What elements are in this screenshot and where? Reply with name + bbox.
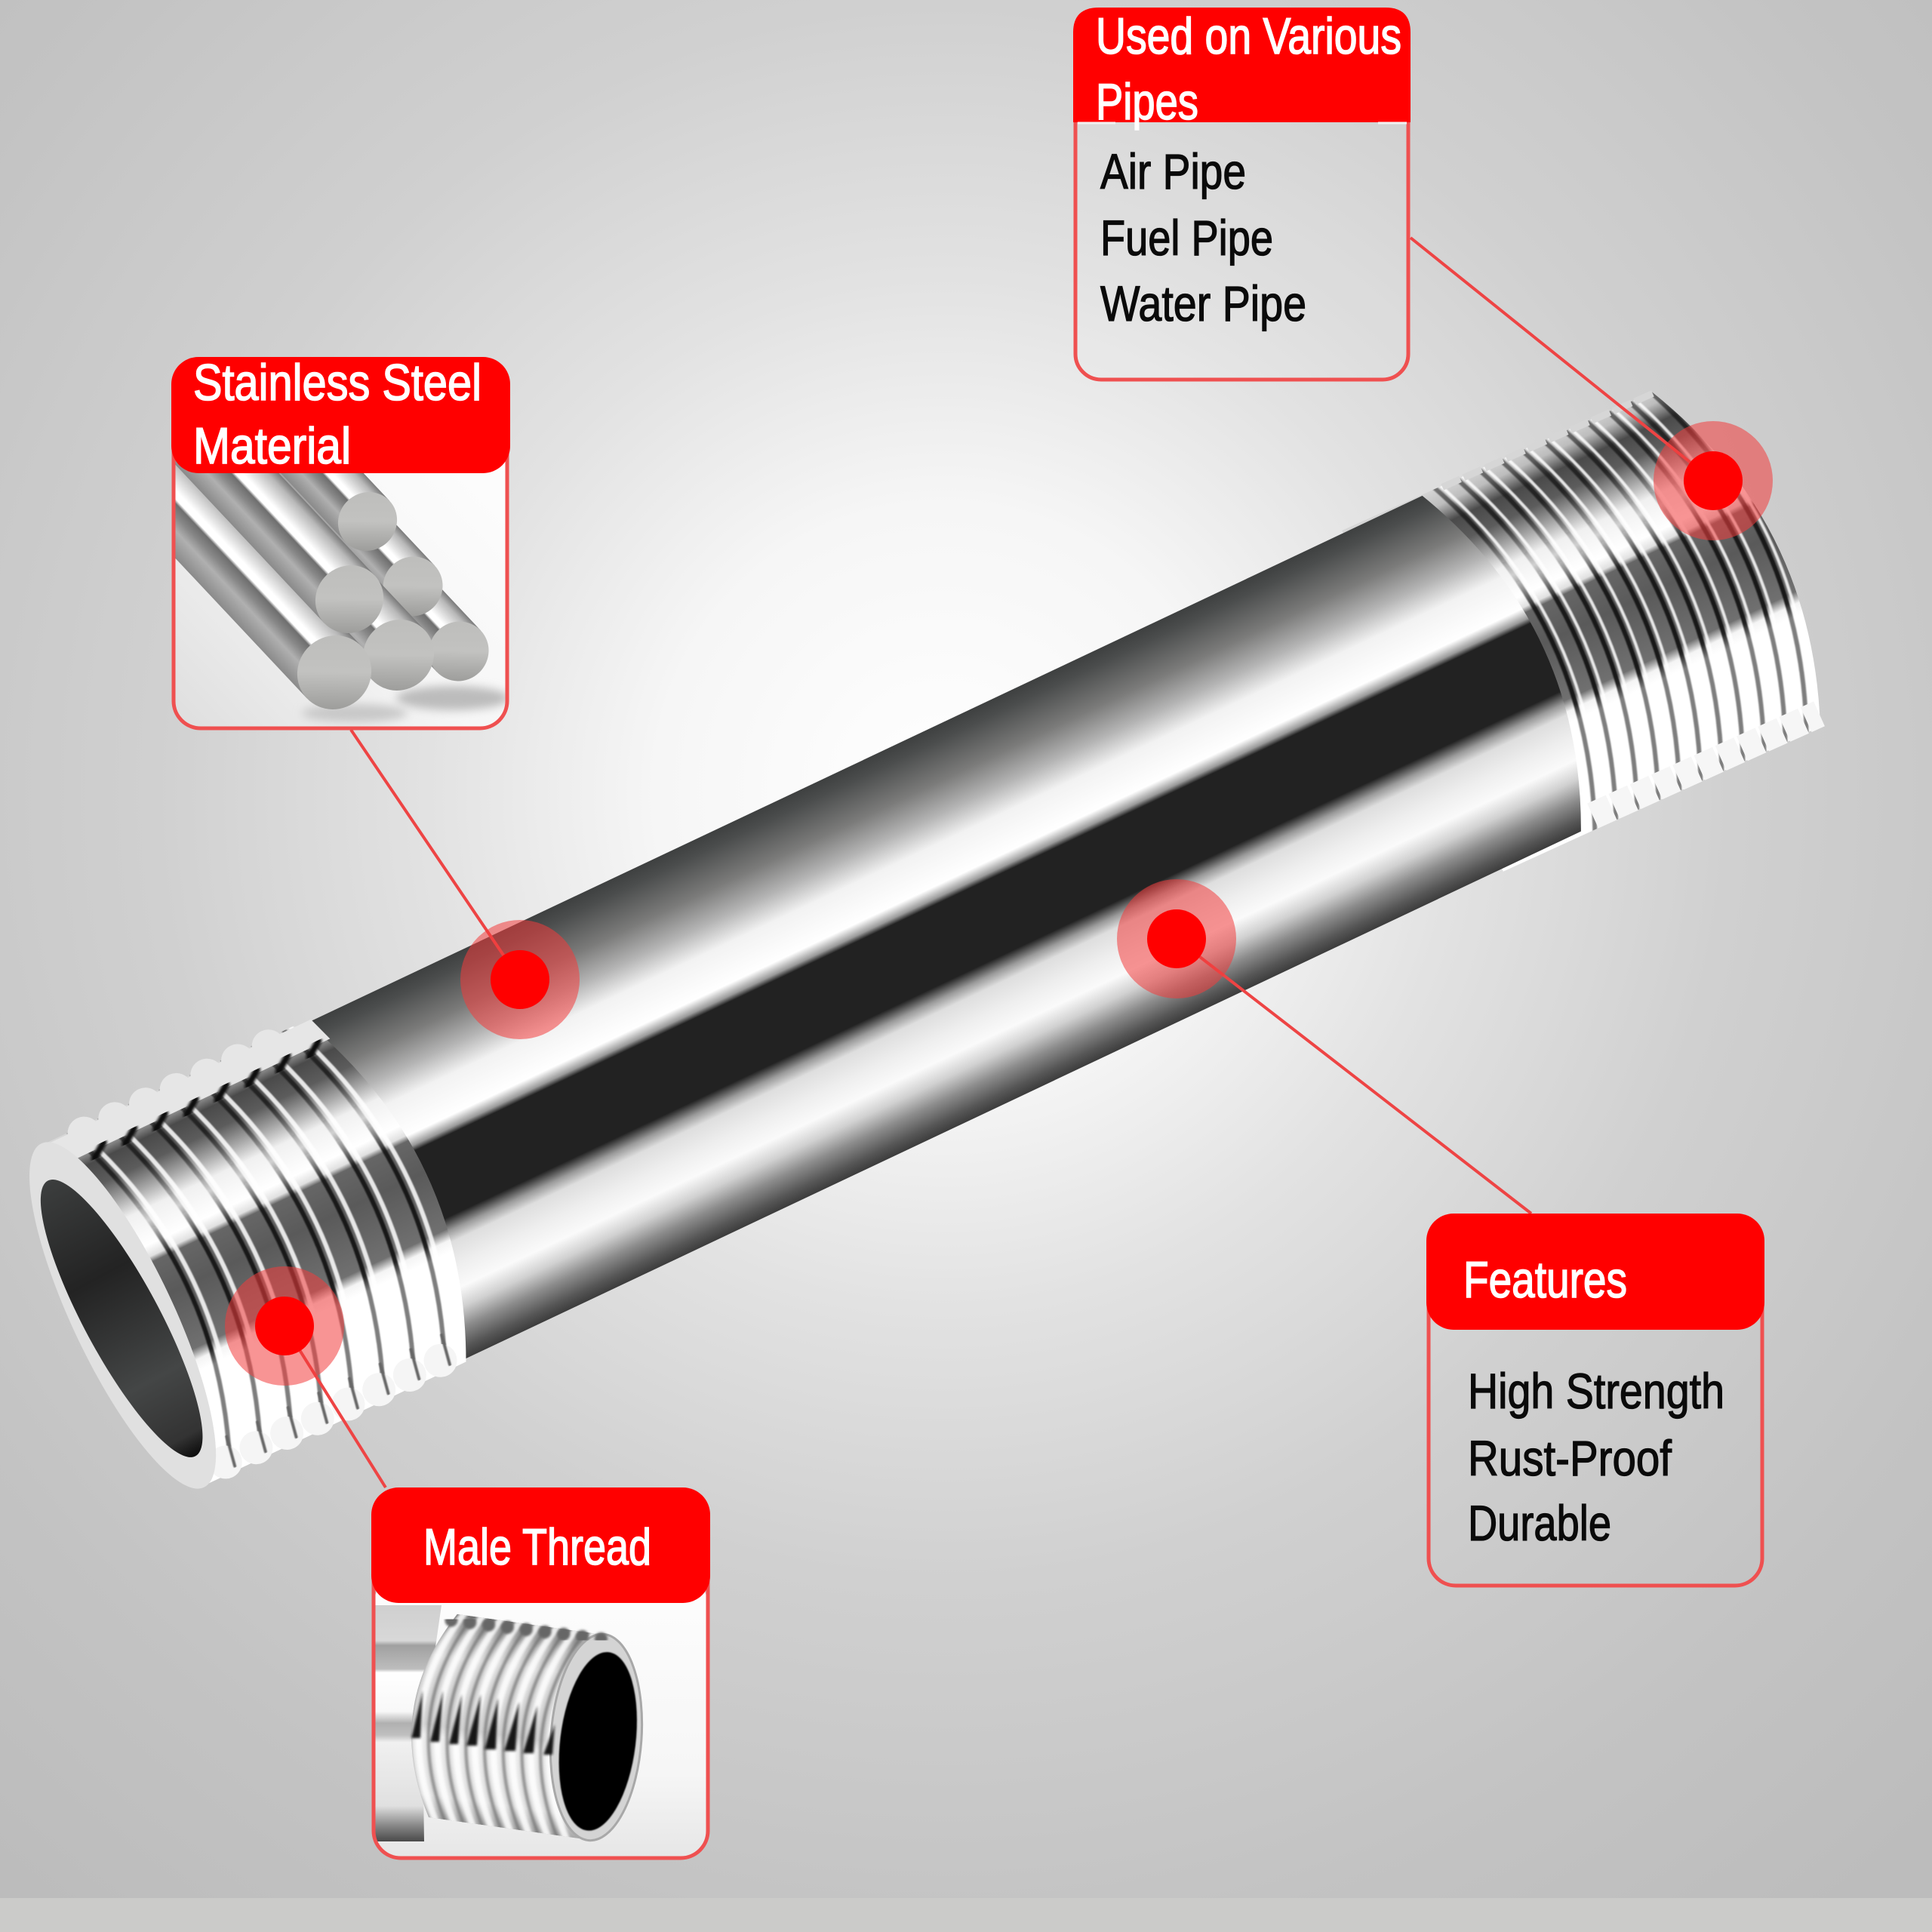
- right male thread: [1342, 392, 1825, 871]
- hotspot: male thread: [225, 1266, 344, 1386]
- panel: male thread: [357, 1487, 710, 1858]
- top crest band and lobes: [46, 1016, 330, 1168]
- hotspot: pipe end: [1654, 421, 1773, 540]
- panel: used on various pipes: [1073, 8, 1411, 380]
- leader line: male thread: [285, 1326, 386, 1487]
- heading: Stainless Steel: [193, 354, 481, 411]
- list item: High Strength: [1468, 1363, 1724, 1419]
- panel: features: [1426, 1214, 1764, 1586]
- thread shadow wedges: [411, 1690, 555, 1755]
- hotspot: body features: [1117, 879, 1236, 998]
- heading line 2: Pipes: [1096, 73, 1198, 131]
- inset: steel rods: [175, 460, 506, 726]
- thread crests: [451, 1620, 604, 1639]
- left male thread: [48, 1020, 466, 1484]
- heading: Used on Various: [1096, 8, 1401, 65]
- inset: threaded pipe end: [376, 1592, 706, 1857]
- pipe body: [292, 477, 1621, 1365]
- hotspot: stainless steel body: [460, 920, 580, 1039]
- list item: Durable: [1468, 1495, 1611, 1551]
- pipe opening: [0, 1122, 250, 1509]
- panel: stainless steel material: [171, 357, 510, 731]
- list item: Water Pipe: [1100, 275, 1306, 331]
- leader line: stainless steel material: [351, 730, 520, 980]
- leader line: features: [1177, 939, 1531, 1214]
- heading: Features: [1463, 1251, 1627, 1309]
- list item: Air Pipe: [1100, 143, 1246, 199]
- leader line: used on various pipes: [1411, 238, 1713, 481]
- heading line 2: Material: [193, 417, 351, 475]
- list item: Fuel Pipe: [1100, 210, 1273, 266]
- list item: Rust-Proof: [1468, 1430, 1672, 1486]
- thread root shadows: [222, 1335, 454, 1466]
- heading: Male Thread: [423, 1518, 651, 1576]
- threaded stainless steel pipe nipple: [29, 392, 1825, 1488]
